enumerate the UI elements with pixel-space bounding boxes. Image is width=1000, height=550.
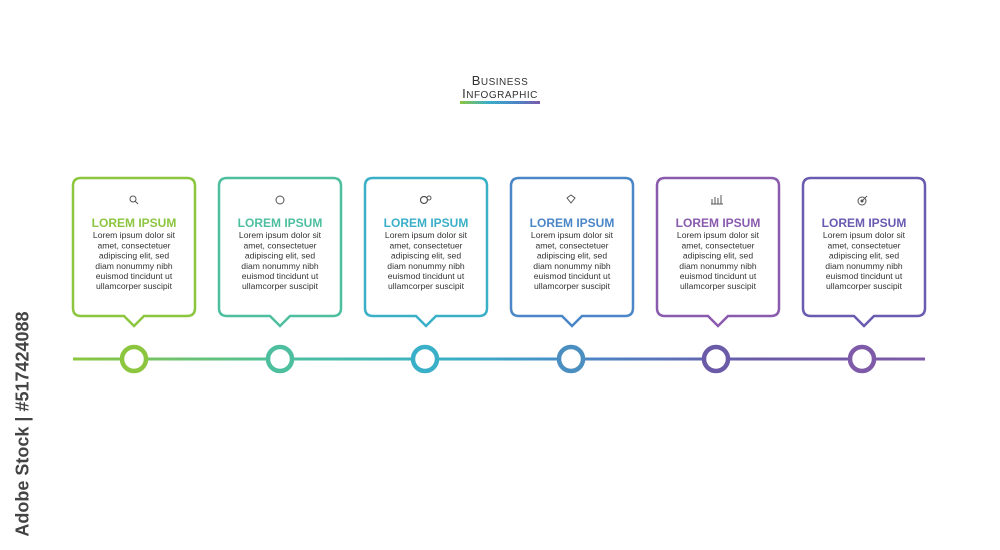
step 1: euismod tincidunt ut xyxy=(96,271,173,281)
step 6 xyxy=(803,178,925,371)
step 4 xyxy=(511,178,633,371)
step 3: diam nonummy nibh xyxy=(387,261,465,271)
step 1: LOREM IPSUM xyxy=(92,216,176,230)
step 3: amet, consectetuer xyxy=(389,240,463,250)
step 3: LOREM IPSUM xyxy=(384,216,468,230)
step 1: adipiscing elit, sed xyxy=(99,250,169,260)
timeline line xyxy=(73,358,925,360)
step 6: amet, consectetuer xyxy=(827,240,901,250)
step 5: euismod tincidunt ut xyxy=(680,271,757,281)
step 2: amet, consectetuer xyxy=(243,240,317,250)
step 5: ullamcorper suscipit xyxy=(680,281,757,291)
step 5 xyxy=(657,178,779,371)
step 5: diam nonummy nibh xyxy=(679,261,757,271)
title: INFOGRAPHIC xyxy=(462,86,538,101)
step 6: ullamcorper suscipit xyxy=(826,281,903,291)
step 2: adipiscing elit, sed xyxy=(245,250,315,260)
step 5: Lorem ipsum dolor sit xyxy=(677,230,760,240)
step 6: adipiscing elit, sed xyxy=(829,250,899,260)
step 3: ullamcorper suscipit xyxy=(388,281,465,291)
step 4: Lorem ipsum dolor sit xyxy=(531,230,614,240)
step 4: euismod tincidunt ut xyxy=(534,271,611,281)
step 4: ullamcorper suscipit xyxy=(534,281,611,291)
step 4: diam nonummy nibh xyxy=(533,261,611,271)
step 1: amet, consectetuer xyxy=(97,240,171,250)
step 6: Lorem ipsum dolor sit xyxy=(823,230,906,240)
step 5: LOREM IPSUM xyxy=(676,216,760,230)
step 1: diam nonummy nibh xyxy=(95,261,173,271)
step 4: amet, consectetuer xyxy=(535,240,609,250)
step 5: amet, consectetuer xyxy=(681,240,755,250)
step 3: euismod tincidunt ut xyxy=(388,271,465,281)
step 5: adipiscing elit, sed xyxy=(683,250,753,260)
step 3: Lorem ipsum dolor sit xyxy=(385,230,468,240)
step 4: LOREM IPSUM xyxy=(530,216,614,230)
step 2: Lorem ipsum dolor sit xyxy=(239,230,322,240)
step 2: euismod tincidunt ut xyxy=(242,271,319,281)
step 1 xyxy=(73,178,195,371)
step 1: ullamcorper suscipit xyxy=(96,281,173,291)
watermark id: Adobe Stock | #517424088 xyxy=(12,311,32,537)
step 6: LOREM IPSUM xyxy=(822,216,906,230)
step 4: adipiscing elit, sed xyxy=(537,250,607,260)
step 2 xyxy=(219,178,341,371)
title: BUSINESS xyxy=(472,73,528,88)
step 3 xyxy=(365,178,487,371)
step 3: adipiscing elit, sed xyxy=(391,250,461,260)
step 2: ullamcorper suscipit xyxy=(242,281,319,291)
step 1: Lorem ipsum dolor sit xyxy=(93,230,176,240)
step 2: diam nonummy nibh xyxy=(241,261,319,271)
step 2: LOREM IPSUM xyxy=(238,216,322,230)
step 6: euismod tincidunt ut xyxy=(826,271,903,281)
title xyxy=(460,73,540,104)
step 6: diam nonummy nibh xyxy=(825,261,903,271)
